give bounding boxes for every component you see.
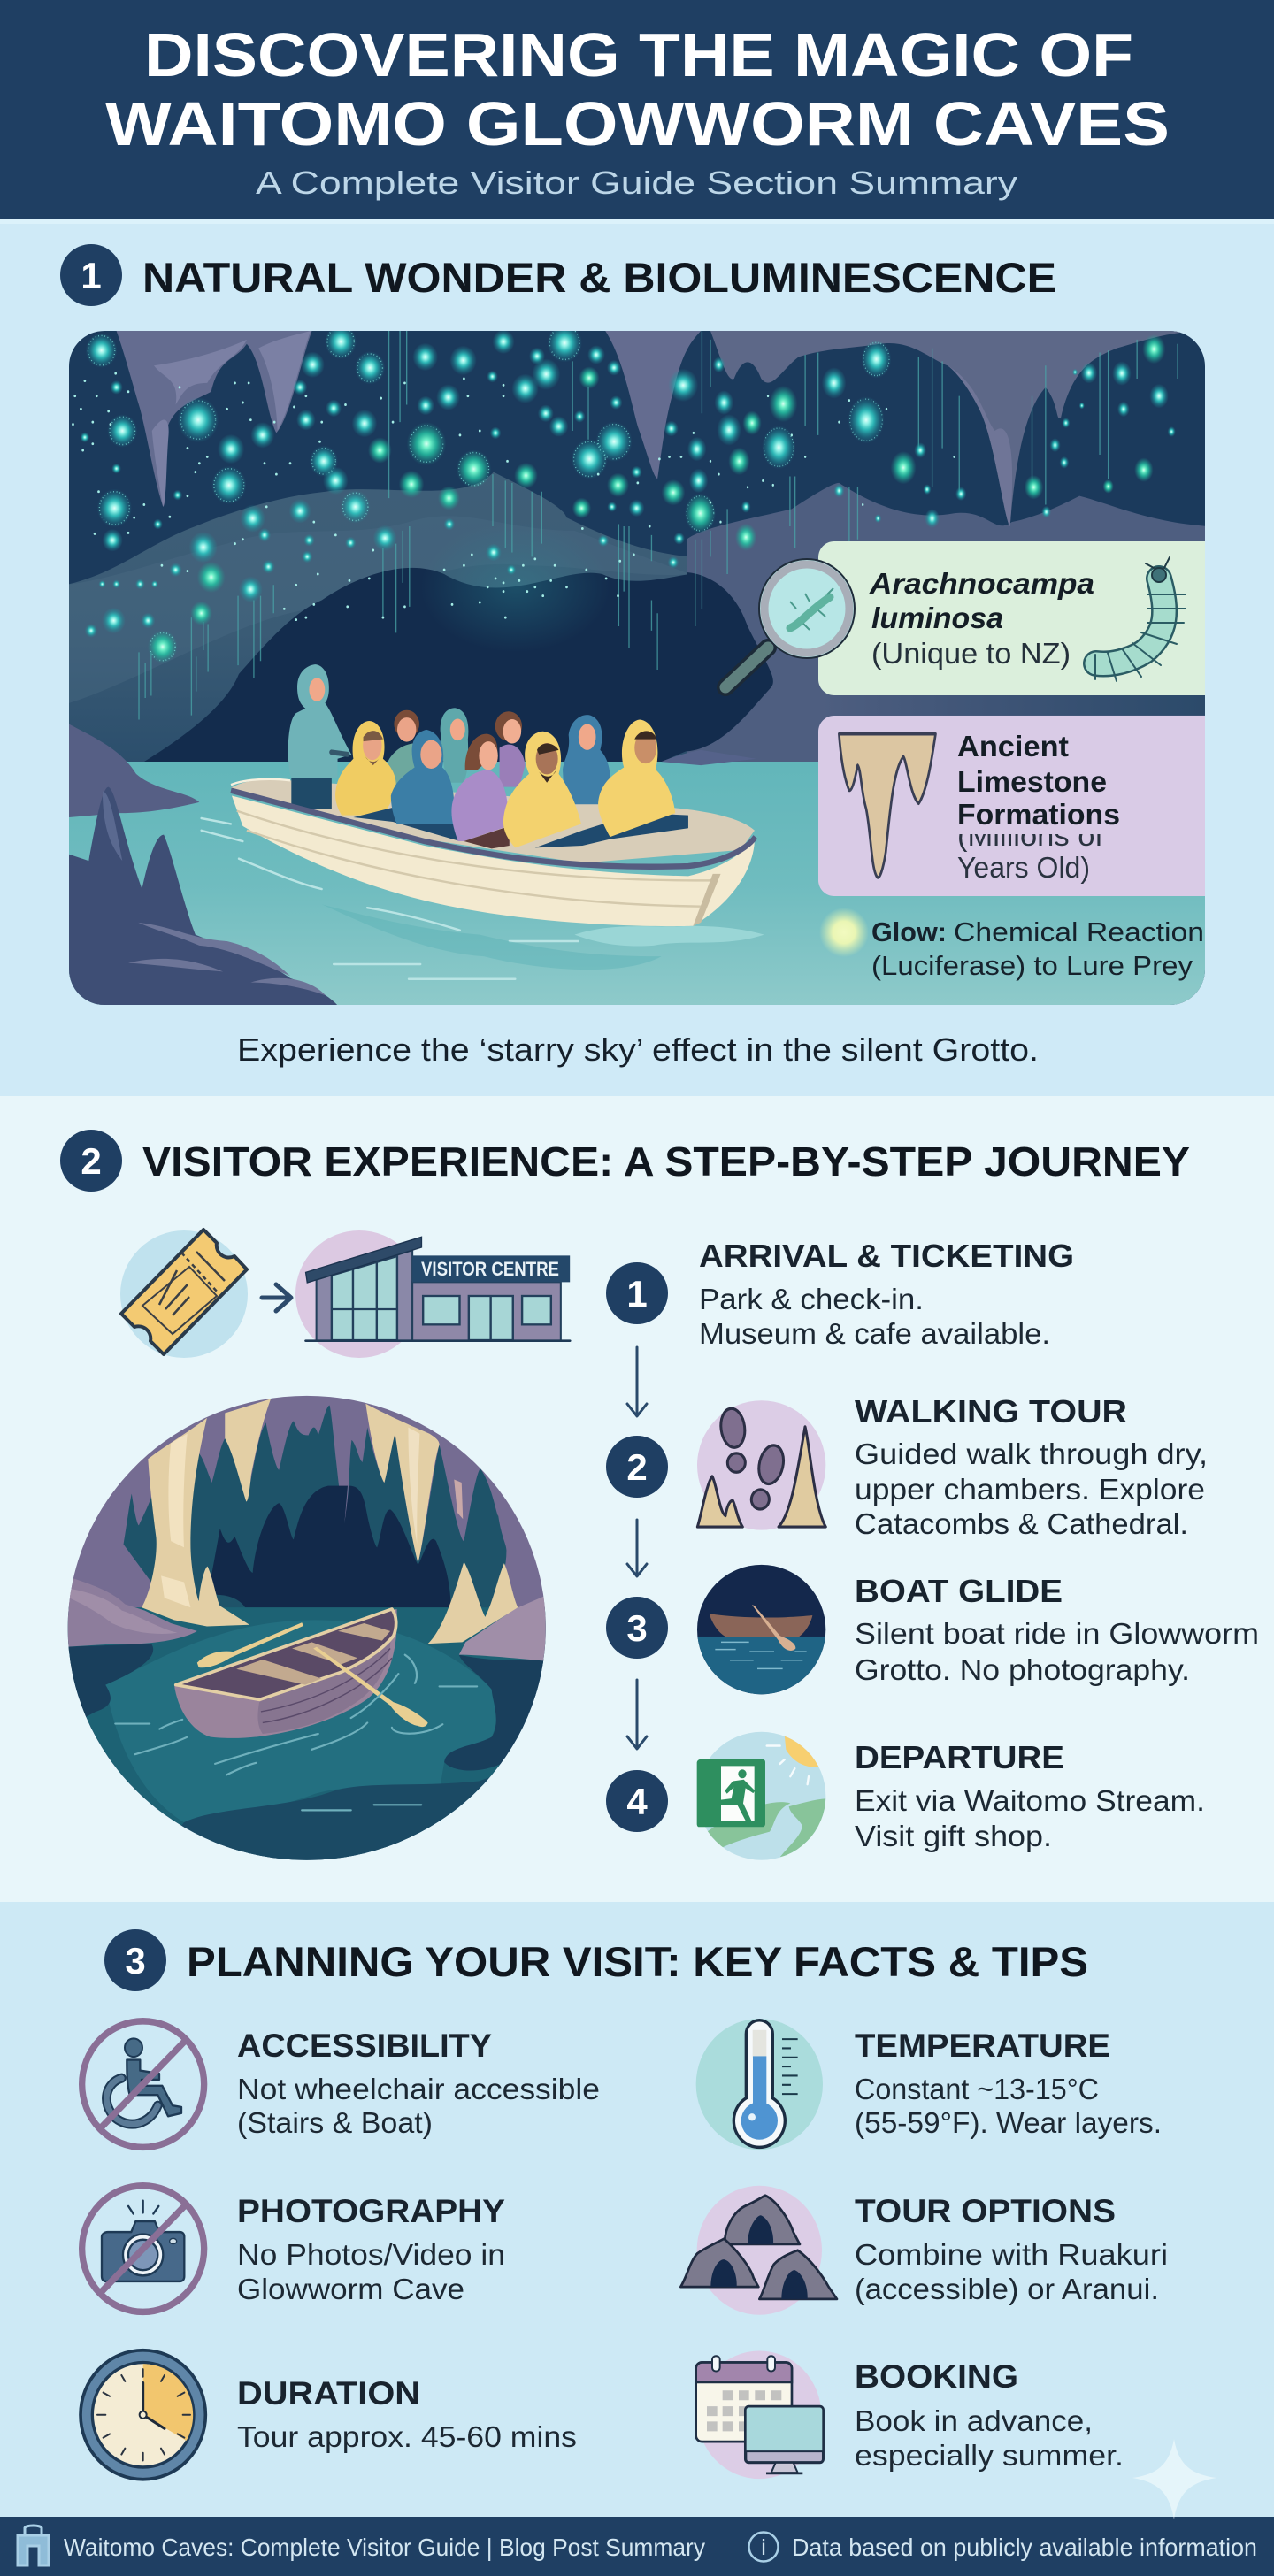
step 4: departure: Visit gift shop. xyxy=(855,1820,1052,1852)
glow note: Chemical Reaction xyxy=(954,916,1204,947)
icon: stalactite xyxy=(839,734,935,878)
step 3: boat glide: Silent boat ride in Glowworm xyxy=(855,1617,1259,1650)
fact: duration: Tour approx. 45-60 mins xyxy=(237,2420,577,2453)
step 2: walking tour: 2 xyxy=(626,1446,648,1488)
title: DISCOVERING THE MAGIC OF xyxy=(144,20,1133,89)
fact: booking: BOOKING xyxy=(855,2358,1018,2395)
footer left text: Waitomo Caves: Complete Visitor Guide | Blog Post Summary xyxy=(64,2534,705,2561)
title: WAITOMO GLOWWORM CAVES xyxy=(105,89,1170,158)
fact: photography xyxy=(82,2186,505,2312)
section 3: planning your visit xyxy=(0,1902,1274,2517)
fact: booking xyxy=(696,2350,1124,2479)
water xyxy=(69,762,1205,1005)
step 2: walking tour: WALKING TOUR xyxy=(855,1393,1127,1430)
section 3 heading: PLANNING YOUR VISIT: KEY FACTS & TIPS xyxy=(187,1938,1088,1985)
limestone text: Limestone xyxy=(957,765,1107,798)
sparkle watermark xyxy=(1132,2439,1216,2519)
water ripples xyxy=(202,818,579,979)
arrow: ticket to visitor centre xyxy=(262,1284,291,1311)
step 1: arrival and ticketing: ARRIVAL & TICKETING xyxy=(699,1238,1074,1274)
step 4: departure: Exit via Waitomo Stream. xyxy=(855,1784,1205,1817)
limestone text: Ancient xyxy=(957,730,1069,763)
step 1: arrival and ticketing xyxy=(606,1238,1074,1350)
section 2 heading: VISITOR EXPERIENCE: A STEP-BY-STEP JOURNEY xyxy=(142,1138,1190,1184)
fact: tour options xyxy=(680,2186,1168,2315)
step 2: walking tour: Catacombs & Cathedral. xyxy=(855,1507,1188,1540)
guide xyxy=(288,664,351,778)
fact: accessibility: Not wheelchair accessible xyxy=(237,2073,600,2105)
icon: magnifying glass with larva xyxy=(725,559,855,687)
step 3: boat glide xyxy=(606,1560,1259,1699)
front row passengers xyxy=(335,720,688,848)
boat and passengers xyxy=(231,664,756,926)
glow note: (Luciferase) to Lure Prey xyxy=(871,950,1193,981)
limestone text: Years Old) xyxy=(957,851,1090,884)
species callout panel xyxy=(725,541,1205,695)
section 1 heading: NATURAL WONDER & BIOLUMINESCENCE xyxy=(142,254,1056,301)
step 2: walking tour: upper chambers. Explore xyxy=(855,1473,1205,1506)
section 2: visitor experience xyxy=(0,1096,1274,1902)
section 1: natural wonder xyxy=(60,244,1205,1067)
limestone text: (Millions of xyxy=(957,819,1104,852)
section 3 heading xyxy=(104,1929,1088,1991)
icon: visitor centre building: VISITOR CENTRE xyxy=(421,1258,559,1280)
header banner xyxy=(0,0,1274,224)
step 2: walking tour xyxy=(606,1393,1208,1540)
icon: ticket xyxy=(120,1230,248,1358)
fact: booking: especially summer. xyxy=(855,2439,1124,2472)
limestone text xyxy=(954,730,1120,884)
inner dark cavern xyxy=(144,568,687,762)
caption: Experience the ‘starry sky’ effect in the silent Grotto. xyxy=(237,1031,1039,1068)
limestone callout panel xyxy=(818,716,1205,896)
section 1 heading xyxy=(60,244,1056,306)
fact: tour options: TOUR OPTIONS xyxy=(855,2193,1116,2229)
fact: tour options: (accessible) or Aranui. xyxy=(855,2273,1159,2305)
fact: temperature: (55-59°F). Wear layers. xyxy=(855,2106,1162,2139)
fact: tour options: Combine with Ruakuri xyxy=(855,2238,1168,2271)
footer bar xyxy=(0,2517,1274,2576)
fact: photography: PHOTOGRAPHY xyxy=(237,2193,505,2229)
species text: luminosa xyxy=(871,602,1003,634)
section 2 heading xyxy=(60,1130,1190,1192)
species text: (Unique to NZ) xyxy=(871,637,1071,670)
icon: three caves xyxy=(680,2186,837,2315)
fact: photography: Glowworm Cave xyxy=(237,2273,464,2305)
illustration: cave rowboat circle xyxy=(67,1396,546,1860)
fact: booking: Book in advance, xyxy=(855,2404,1093,2437)
back row passengers xyxy=(385,708,611,804)
icon: calendar and computer xyxy=(696,2350,824,2479)
glow note xyxy=(819,908,1204,981)
footer right text: Data based on publicly available information xyxy=(792,2534,1257,2561)
step 3: boat glide: Grotto. No photography. xyxy=(855,1653,1190,1686)
fact: accessibility: ACCESSIBILITY xyxy=(237,2028,492,2064)
section 3 heading: 3 xyxy=(125,1940,146,1982)
icon: info: i xyxy=(761,2535,766,2560)
step 4: departure xyxy=(606,1726,1205,1865)
step 4: departure: 4 xyxy=(626,1781,648,1822)
illustration: cave boat scene xyxy=(65,324,1209,1012)
right rock mass xyxy=(687,331,1209,765)
fact: temperature: TEMPERATURE xyxy=(855,2028,1110,2064)
subtitle: A Complete Visitor Guide Section Summary xyxy=(256,165,1017,201)
step 1: arrival and ticketing: Park & check-in. xyxy=(699,1283,924,1315)
step 1: arrival and ticketing: Museum & cafe available. xyxy=(699,1317,1050,1350)
stalactites xyxy=(117,331,312,507)
boat hull xyxy=(232,795,755,926)
step 1: arrival and ticketing: 1 xyxy=(626,1273,648,1315)
icon: no wheelchair xyxy=(82,2021,204,2147)
fact: accessibility xyxy=(82,2021,600,2147)
fact: accessibility: (Stairs & Boat) xyxy=(237,2106,433,2139)
bank rocks xyxy=(69,724,199,817)
boat interior xyxy=(231,779,755,863)
icon: exit sign and stream xyxy=(696,1726,829,1865)
timeline: arrows between steps xyxy=(627,1347,647,1749)
fact: temperature: Constant ~13-15°C xyxy=(855,2073,1099,2105)
species text: Arachnocampa xyxy=(869,567,1094,600)
step 4: departure: DEPARTURE xyxy=(855,1739,1064,1775)
species text xyxy=(869,567,1094,670)
glowworm lights xyxy=(73,324,1178,720)
icon: info xyxy=(748,2532,779,2562)
fact: photography: No Photos/Video in xyxy=(237,2238,505,2271)
icon: boat on dark water xyxy=(696,1560,829,1699)
icon: larva xyxy=(1095,557,1186,681)
icon: clock xyxy=(81,2350,205,2480)
thread lines xyxy=(139,331,657,720)
icon: footer cave mark xyxy=(18,2526,49,2565)
fact: duration xyxy=(81,2350,577,2480)
icon: thermometer xyxy=(696,2019,823,2150)
icon: footprints and stalagmites xyxy=(697,1400,825,1530)
far oar xyxy=(197,1622,303,1668)
limestone text: Formations xyxy=(957,798,1120,831)
fact: duration: DURATION xyxy=(237,2375,420,2411)
icon: no camera xyxy=(82,2186,204,2312)
glow note: Glow: xyxy=(871,916,947,947)
title xyxy=(105,20,1170,158)
section 1 heading: 1 xyxy=(81,255,102,296)
step 3: boat glide: 3 xyxy=(626,1607,648,1649)
step 2: walking tour: Guided walk through dry, xyxy=(855,1438,1208,1470)
section 2 heading: 2 xyxy=(81,1140,102,1182)
step 3: boat glide: BOAT GLIDE xyxy=(855,1573,1063,1609)
fact: temperature xyxy=(696,2019,1162,2150)
cave band xyxy=(65,472,690,765)
icon: visitor centre building xyxy=(295,1230,570,1358)
